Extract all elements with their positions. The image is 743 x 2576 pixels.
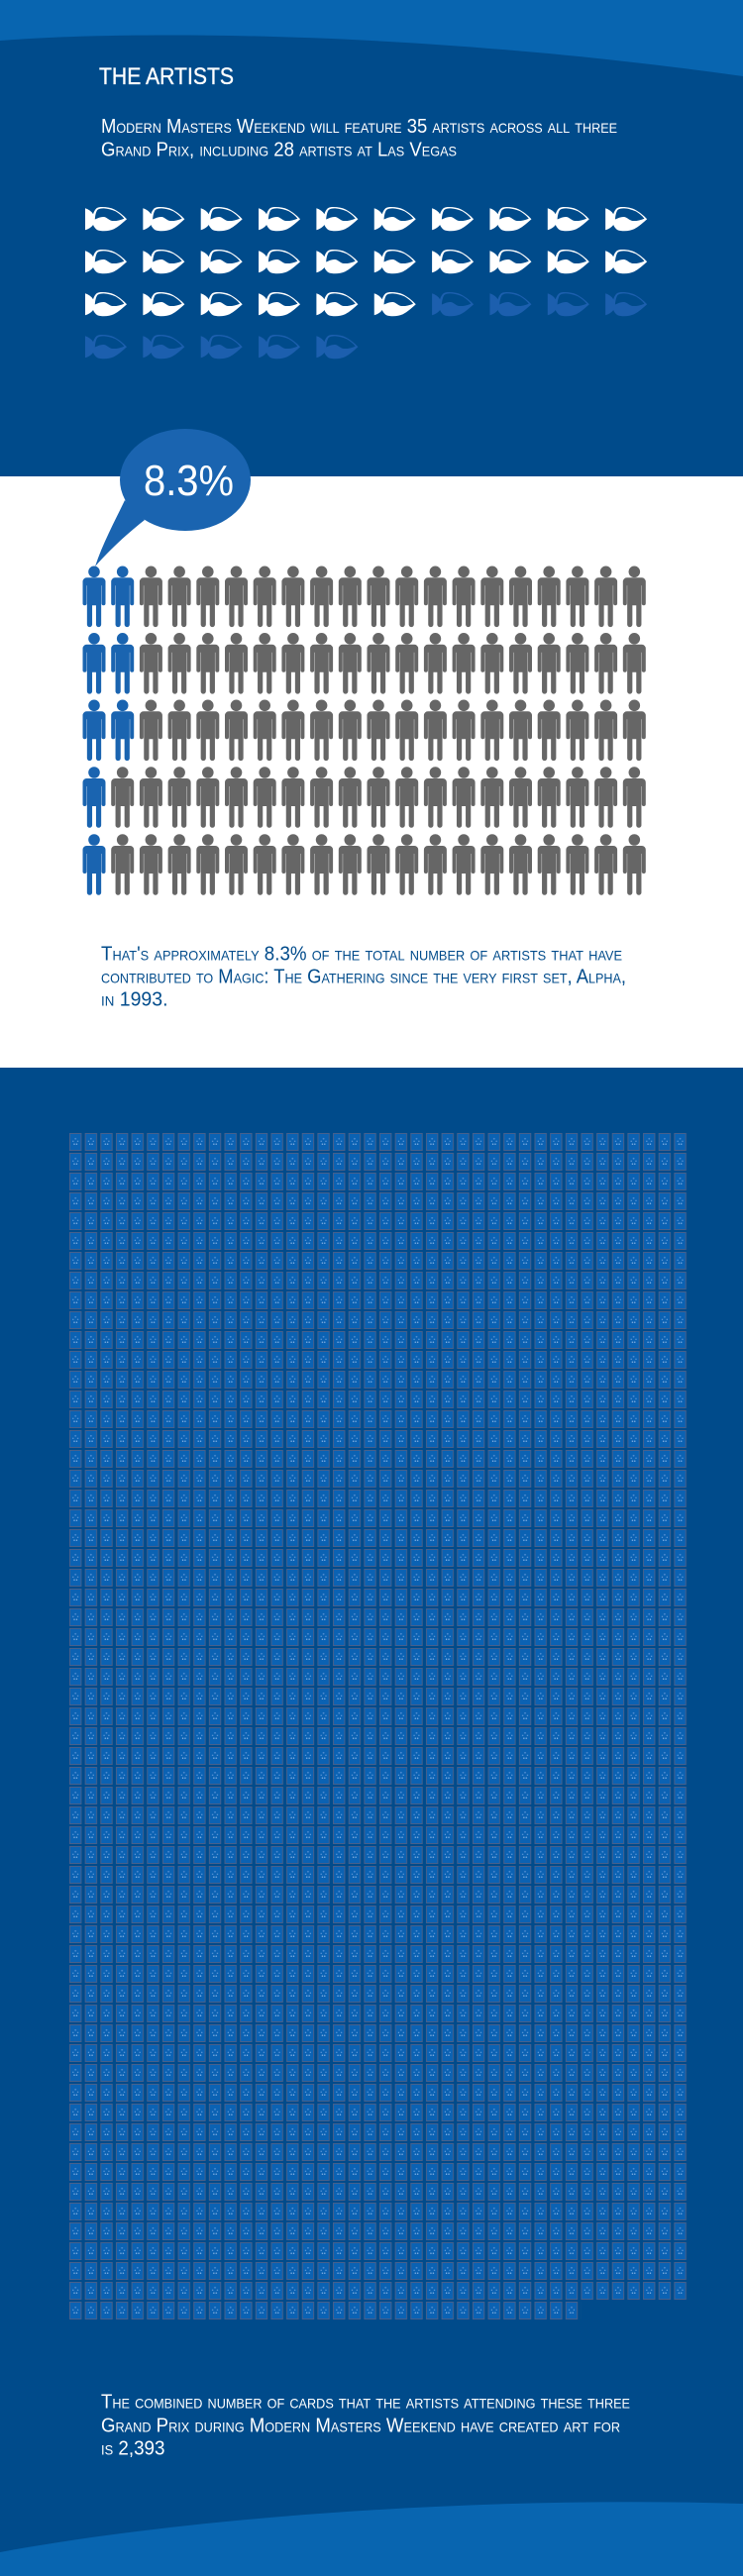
callout bubble 8.3%: 8.3% xyxy=(144,457,234,505)
pictogram: 100 people, 8 highlighted xyxy=(83,567,646,895)
intro text xyxy=(101,115,617,160)
panel: cards illustrated xyxy=(0,1068,743,2576)
card grid: 2,393 cards xyxy=(69,1133,690,2321)
cards description: is 2,393 xyxy=(101,2437,164,2460)
percentage description: in 1993. xyxy=(101,988,168,1011)
icon grid: 35 artists, 28 highlighted xyxy=(85,207,647,359)
intro text: Grand Prix, including 28 artists at Las Vegas xyxy=(101,139,457,160)
bottom curved band xyxy=(0,2502,743,2576)
panel: percentage of artists xyxy=(0,429,743,1068)
intro text: Modern Masters Weekend will feature 35 artists across all three xyxy=(101,115,617,138)
panel: the artists header xyxy=(0,0,743,476)
title: THE ARTISTS xyxy=(99,63,234,90)
percentage description: contributed to Magic: The Gathering since the very first set, Alpha, xyxy=(101,965,626,988)
cards description xyxy=(101,2391,630,2460)
top curved band xyxy=(0,0,743,76)
percentage description: That's approximately 8.3% of the total number of artists that have xyxy=(101,942,622,965)
percentage description xyxy=(101,942,626,1011)
cards description: Grand Prix during Modern Masters Weekend have created art for xyxy=(101,2414,620,2436)
cards description: The combined number of cards that the artists attending these three xyxy=(101,2391,630,2414)
callout bubble 8.3% xyxy=(95,429,251,567)
